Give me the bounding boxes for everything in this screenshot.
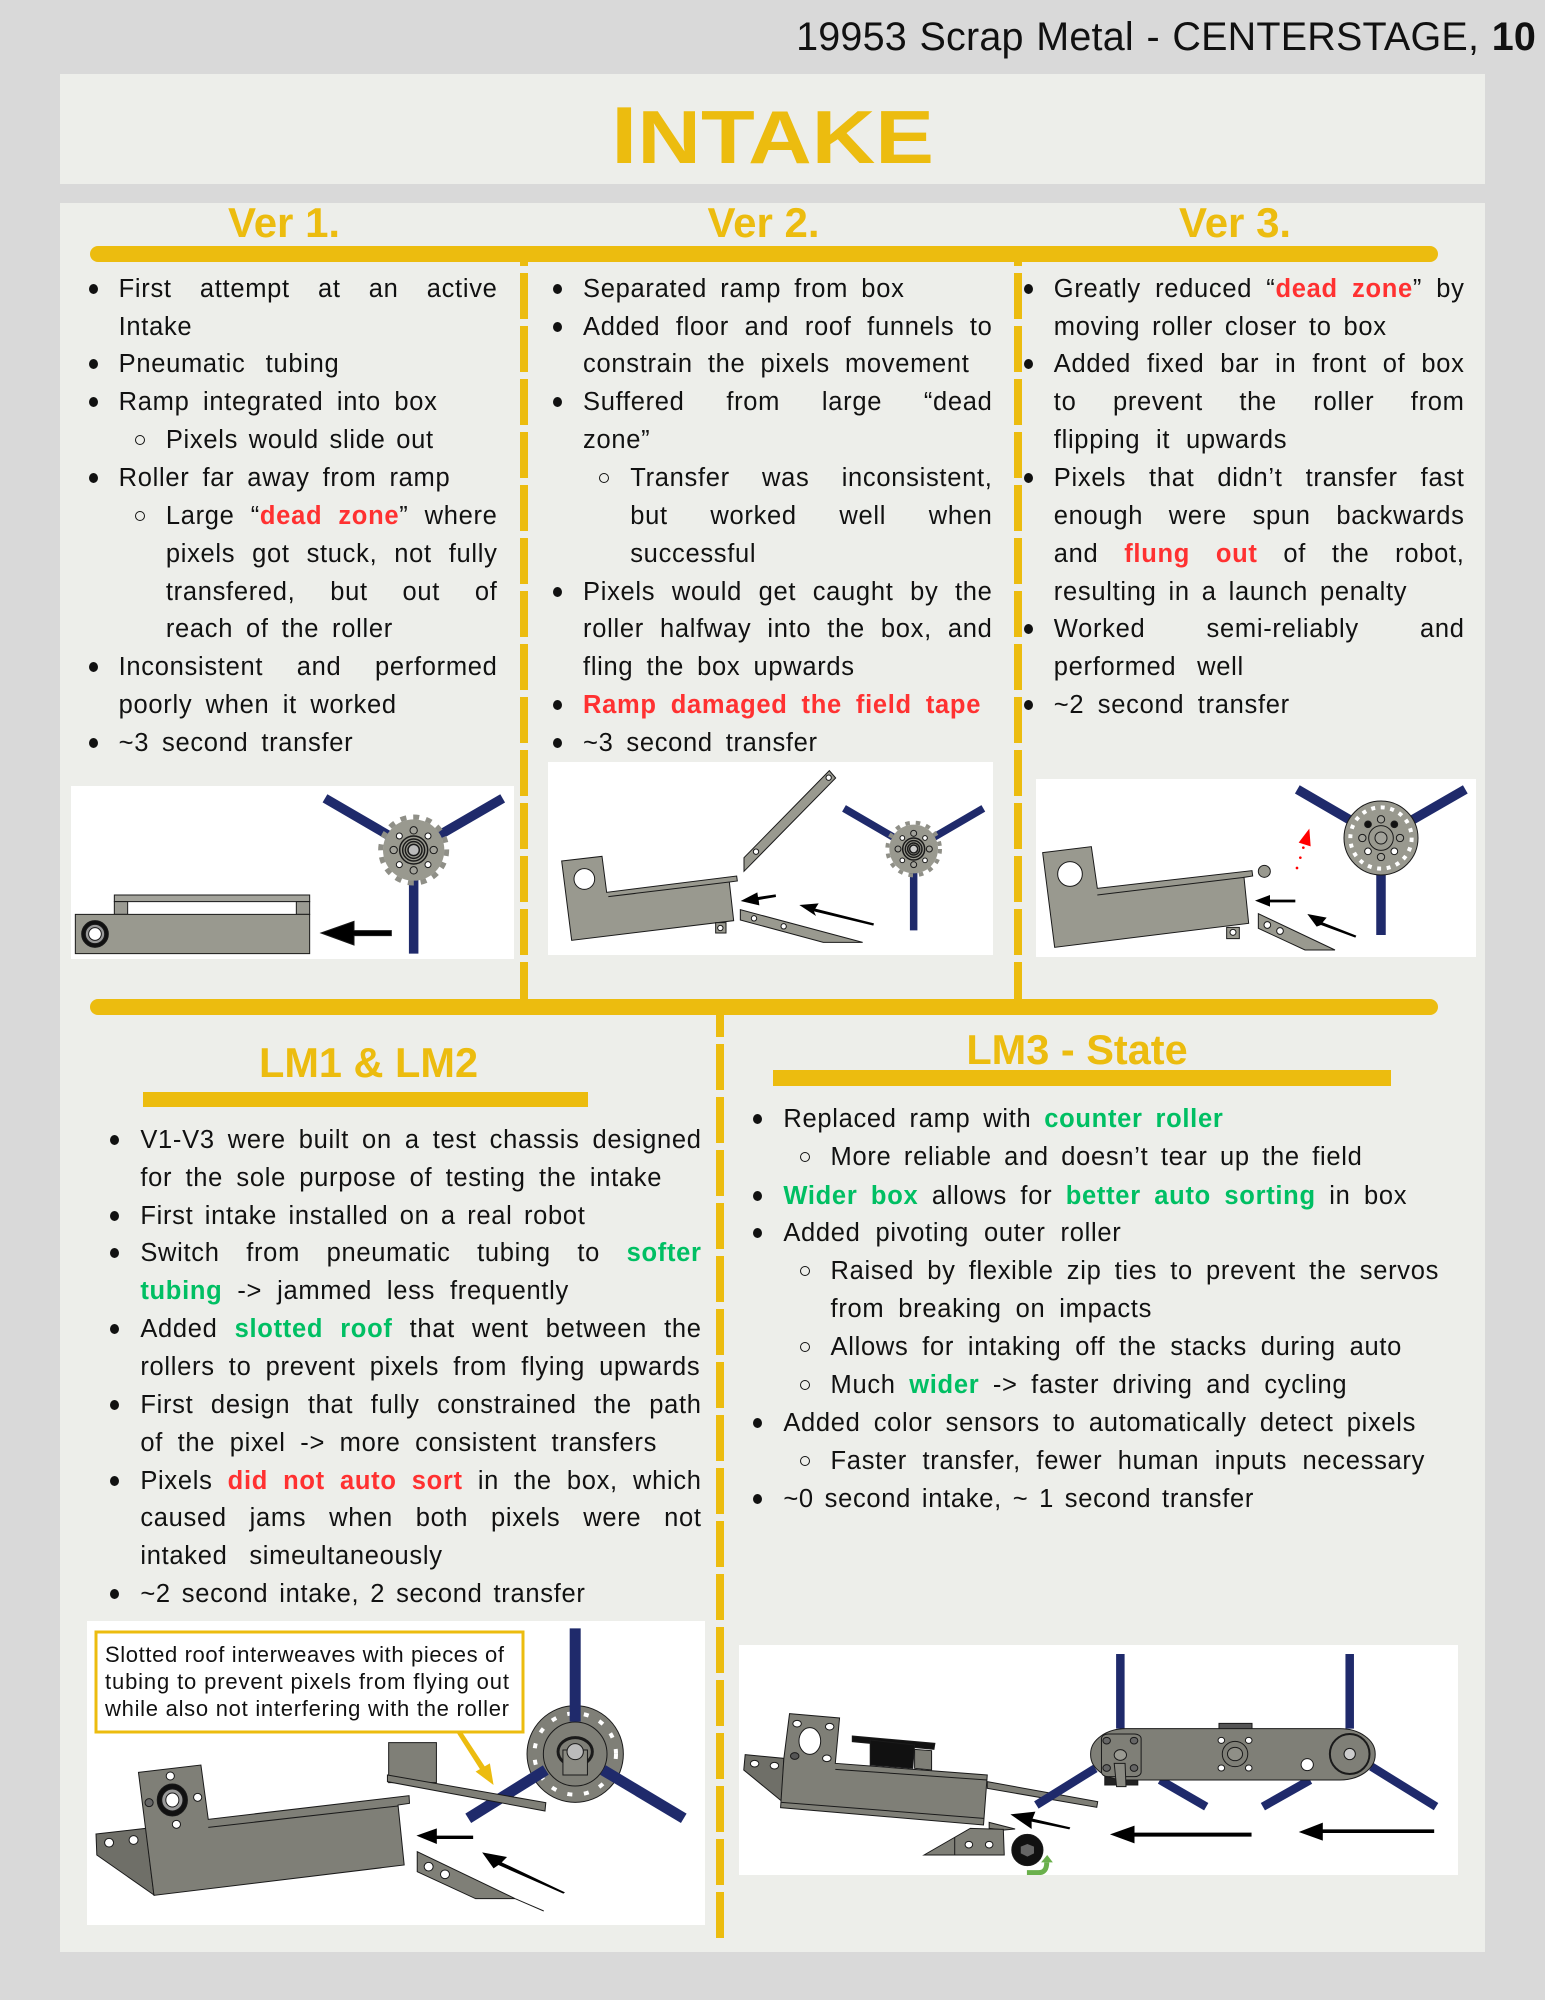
text block: Ver 1 notes: Inconsistent and performed (119, 653, 498, 681)
text block: LM1 and LM2 notes: First design that fully constrained the path (140, 1391, 702, 1419)
heading: Ver 3: Ver 3. (1179, 199, 1291, 246)
text block: Ver 2 notes: Added floor and roof funnels to (583, 313, 993, 341)
text block: Ver 2 notes: constrain the pixels movement (583, 350, 970, 378)
text block: LM3 State notes: Added color sensors to automatically detect pixels (783, 1409, 1416, 1437)
text block: Ver 1 notes: Large “dead zone” where (166, 502, 498, 530)
text block: Ver 1 notes: Roller far away from ramp (119, 464, 450, 492)
text block: LM1 and LM2 notes (110, 1126, 702, 1608)
text block: Ver 2 notes: Suffered from large “dead (583, 388, 993, 416)
text block: Ver 1 notes: Pneumatic tubing (119, 350, 339, 378)
text block: LM3 State notes: from breaking on impacts (831, 1295, 1152, 1323)
text block: Ver 3 notes: Pixels that didn’t transfer fast (1054, 464, 1465, 492)
text block: Ver 1 notes: Intake (119, 313, 192, 341)
panel: LM3 State (739, 1026, 1458, 1875)
text block: LM1 and LM2 notes: rollers to prevent pixels from flying upwards (140, 1353, 700, 1381)
text block: Ver 2 notes: successful (630, 540, 756, 568)
text block: LM3 State notes: Raised by flexible zip ties to prevent the servos (831, 1257, 1439, 1285)
text block: Ver 2 notes (553, 275, 993, 757)
text block: Ver 2 notes: fling the box upwards (583, 653, 855, 681)
text block: Ver 1 notes: pixels got stuck, not fully (166, 540, 498, 568)
text block: Ver 1 notes: ~3 second transfer (119, 729, 353, 757)
callout (96, 1632, 522, 1732)
text block: LM1 and LM2 notes: First intake installed on a real robot (140, 1202, 586, 1230)
text block: Ver 1 notes: First attempt at an active (119, 275, 498, 303)
text block: Ver 3 notes: enough were spun backwards (1054, 502, 1465, 530)
page header: 19953 Scrap Metal - CENTERSTAGE, 10 (796, 15, 1536, 59)
text block: Ver 2 notes: Transfer was inconsistent, (630, 464, 993, 492)
text block: Ver 2 notes: roller halfway into the box, and (583, 615, 993, 643)
text block: Ver 3 notes: ~2 second transfer (1054, 691, 1290, 719)
text block: Ver 3 notes: Worked semi-reliably and (1054, 615, 1465, 643)
text block: Ver 3 notes: flipping it upwards (1054, 426, 1287, 454)
text block: LM1 and LM2 notes: of the pixel -> more consistent transfers (140, 1429, 657, 1457)
diagram: Ver 3 intake side view (1036, 779, 1476, 957)
text block: LM3 State notes: Allows for intaking off the stacks during auto (831, 1333, 1402, 1361)
heading: LM1 and LM2: LM1 & LM2 (259, 1039, 478, 1086)
text block: LM3 State notes: Replaced ramp with counter roller (783, 1105, 1223, 1133)
callout: Slotted roof interweaves with pieces of (104, 1642, 504, 1667)
text block: LM3 State notes: More reliable and doesn’t tear up the field (831, 1143, 1363, 1171)
panel: LM1 and LM2 (87, 1039, 705, 1925)
text block: LM3 State notes (753, 1105, 1439, 1513)
text block: Ver 3 notes (1024, 275, 1465, 719)
text block: Ver 2 notes: but worked well when (630, 502, 993, 530)
text block: Ver 3 notes: Greatly reduced “dead zone” by (1054, 275, 1465, 303)
text block: Ver 1 notes: Pixels would slide out (166, 426, 434, 454)
callout: while also not interfering with the roller (104, 1696, 508, 1721)
panel: Ver 2 (548, 199, 993, 955)
text block: LM1 and LM2 notes: Added slotted roof that went between the (140, 1315, 702, 1343)
text block: Ver 3 notes: and flung out of the robot, (1054, 540, 1465, 568)
text block: Ver 2 notes: Ramp damaged the field tape (583, 691, 981, 719)
text block: Ver 1 notes (89, 275, 498, 757)
text block: Ver 3 notes: performed well (1054, 653, 1244, 681)
text block: LM1 and LM2 notes: tubing -> jammed less frequently (140, 1277, 569, 1305)
text block: Ver 3 notes: Added fixed bar in front of box (1054, 350, 1465, 378)
diagram: Ver 2 intake side view (548, 762, 993, 955)
text block: Ver 2 notes: ~3 second transfer (583, 729, 818, 757)
text block: Ver 1 notes: transfered, but out of (166, 578, 498, 606)
text block: LM1 and LM2 notes: Pixels did not auto sort in the box, which (140, 1467, 702, 1495)
callout: tubing to prevent pixels from flying out (104, 1669, 508, 1694)
heading: Ver 2: Ver 2. (707, 199, 820, 246)
heading: Ver 1: Ver 1. (228, 199, 340, 246)
text block: Ver 2 notes: Pixels would get caught by the (583, 578, 993, 606)
heading: LM3 State: LM3 - State (966, 1026, 1188, 1073)
diagram: LM1 and LM2 intake with callout (87, 1621, 705, 1925)
text block: LM3 State notes: Added pivoting outer roller (783, 1219, 1121, 1247)
text block: Ver 3 notes: to prevent the roller from (1054, 388, 1465, 416)
text block: LM3 State notes: Much wider -> faster driving and cycling (831, 1371, 1347, 1399)
text block: LM3 State notes: Faster transfer, fewer human inputs necessary (831, 1447, 1425, 1475)
text block: LM1 and LM2 notes: for the sole purpose of testing the intake (140, 1164, 662, 1192)
text block: LM1 and LM2 notes: caused jams when both pixels were not (140, 1504, 702, 1532)
text block: Ver 2 notes: zone” (583, 426, 650, 454)
diagram: Ver 1 intake side view (71, 786, 514, 959)
panel: Ver 1 (71, 199, 514, 959)
text block: LM1 and LM2 notes: intaked simeultaneously (140, 1542, 443, 1570)
text block: LM1 and LM2 notes: V1-V3 were built on a test chassis designed (140, 1126, 702, 1154)
text block: Ver 1 notes: Ramp integrated into box (119, 388, 438, 416)
text block: LM3 State notes: ~0 second intake, ~ 1 second transfer (783, 1485, 1254, 1513)
title panel (60, 74, 1485, 184)
text block: LM1 and LM2 notes: Switch from pneumatic tubing to softer (140, 1239, 702, 1267)
text block: Ver 1 notes: poorly when it worked (119, 691, 397, 719)
text block: Ver 3 notes: resulting in a launch penalty (1054, 578, 1407, 606)
text block: Ver 2 notes: Separated ramp from box (583, 275, 905, 303)
text block: LM1 and LM2 notes: ~2 second intake, 2 second transfer (140, 1580, 586, 1608)
panel: Ver 3 (1024, 199, 1476, 957)
text block: Ver 1 notes: reach of the roller (166, 615, 393, 643)
text block: Ver 3 notes: moving roller closer to box (1054, 313, 1387, 341)
text block: LM3 State notes: Wider box allows for better auto sorting in box (783, 1182, 1407, 1210)
diagram: LM3 State intake (739, 1645, 1458, 1875)
